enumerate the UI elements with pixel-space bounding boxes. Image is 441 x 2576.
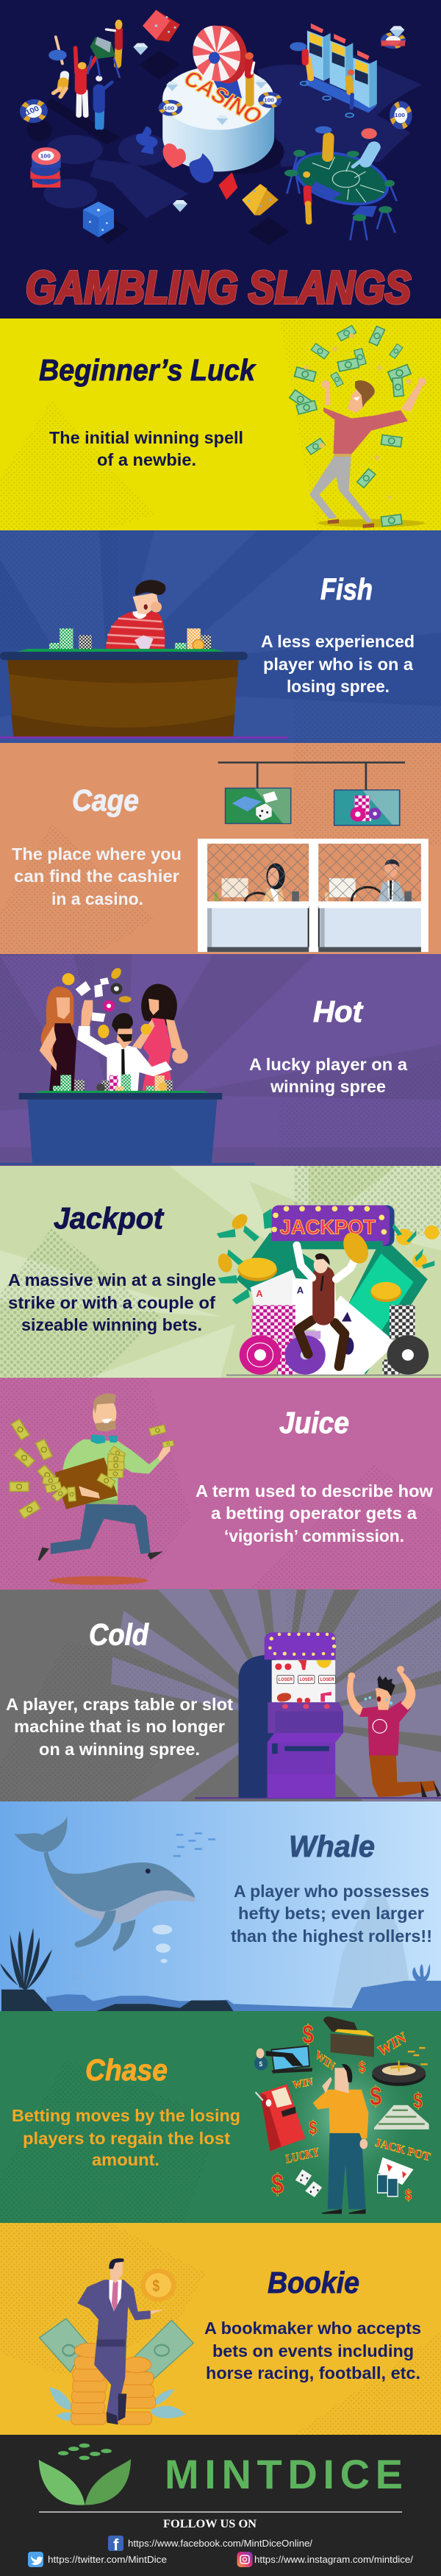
- table: [0, 1091, 254, 1165]
- definition: [6, 1695, 233, 1759]
- arm and hand: [157, 1442, 171, 1462]
- definition: [8, 1270, 216, 1334]
- definition: [12, 844, 182, 908]
- visitors: [49, 20, 122, 127]
- coral: [412, 1964, 430, 1982]
- panel: bookie: [0, 2223, 441, 2435]
- slot machine and loser: [195, 1632, 441, 1799]
- word stickers: WIN: [292, 2075, 314, 2091]
- running man with cash: [10, 1393, 174, 1585]
- panel: chase: [0, 2011, 441, 2223]
- definition: A massive win at a single: [8, 1270, 216, 1289]
- icon: facebook: f: [113, 2536, 119, 2554]
- coins and flying notes: [216, 1209, 439, 1304]
- heading: Hot: [313, 995, 364, 1028]
- dollar signs: $: [309, 2117, 317, 2138]
- definition: A less experienced: [261, 632, 415, 651]
- flying coins and cards: [62, 967, 152, 1038]
- jackpot scene: [216, 1205, 441, 1376]
- casino sign: CASINO: [179, 65, 268, 129]
- hostess: [245, 52, 254, 103]
- cashier: woman: [215, 864, 299, 901]
- suits: [136, 127, 214, 183]
- icon: twitter: [28, 2552, 43, 2567]
- definition: A player, craps table or slot: [6, 1695, 233, 1714]
- chip stack: 100: [40, 153, 51, 160]
- word stickers: JACK POT: [374, 2136, 431, 2164]
- definition: losing spree.: [287, 677, 390, 696]
- heading: Cage: [72, 783, 139, 817]
- banknotes: [10, 1419, 174, 1518]
- card table: [284, 127, 397, 241]
- banknotes: [40, 2319, 193, 2380]
- cashier counters: [198, 763, 429, 952]
- definition: [204, 2319, 421, 2383]
- floating coin: $: [152, 2277, 159, 2296]
- slot machine: [255, 2084, 305, 2151]
- businessman on coins: [40, 2258, 193, 2424]
- seaweed: [0, 1928, 52, 1990]
- whale: [14, 1816, 195, 1951]
- definition: on a winning spree.: [39, 1740, 200, 1759]
- playing cards: A: [256, 1288, 263, 1299]
- seabed scene: [0, 1816, 441, 2011]
- slot machines: [290, 24, 377, 117]
- definition: The place where you: [12, 844, 182, 864]
- dollar signs: $: [414, 2090, 423, 2113]
- definition: a betting operator gets a: [211, 1504, 417, 1523]
- icon: instagram: [237, 2552, 253, 2567]
- definition: can find the cashier: [14, 867, 179, 886]
- heading: Whale: [289, 1829, 375, 1863]
- woman right: [132, 983, 188, 1092]
- big banknotes: [236, 1232, 428, 1375]
- word stickers: WIN: [376, 2029, 409, 2061]
- logo mark: [39, 2444, 131, 2505]
- definition: The initial winning spell: [49, 428, 243, 447]
- leaves: [49, 2387, 186, 2421]
- player: [106, 580, 165, 649]
- heading: Beginner’s Luck: [39, 353, 257, 387]
- dollar signs: $: [405, 2186, 412, 2203]
- chip stacks: [53, 1075, 173, 1092]
- coin stacks: [71, 2343, 156, 2424]
- wordmark: MINTDICE: [165, 2451, 403, 2497]
- head: [93, 1393, 116, 1431]
- panel: juice: [0, 1378, 441, 1590]
- panel: cold: [0, 1589, 441, 1801]
- follow us heading: FOLLOW US ON: [163, 2518, 257, 2530]
- definition: ‘vigorish’ commission.: [224, 1526, 404, 1545]
- definition: than the highest rollers!!: [231, 1926, 432, 1946]
- definition: [249, 1055, 408, 1096]
- slot machine: LOSER: [300, 1677, 313, 1682]
- treasure chest: [323, 2017, 374, 2057]
- bubbles: [152, 1925, 172, 1963]
- definition: Betting moves by the losing: [12, 2106, 240, 2125]
- slot machine: [239, 1632, 343, 1798]
- dollar signs: $: [302, 2019, 314, 2049]
- definition: sizeable winning bets.: [21, 1315, 202, 1334]
- definition: strike or with a couple of: [8, 1293, 215, 1312]
- dice: [83, 10, 279, 238]
- rays: [111, 1589, 441, 1801]
- definition: of a newbie.: [97, 450, 196, 469]
- winning player with companions: [0, 967, 254, 1165]
- man: [77, 1000, 172, 1092]
- icon: facebook: [108, 2536, 123, 2554]
- man: [313, 2064, 368, 2214]
- panel: cage: [0, 743, 441, 954]
- dollar signs: $: [359, 2059, 365, 2077]
- heading: Cold: [89, 1618, 149, 1651]
- marquee sign: JACKPOT: [280, 1216, 376, 1239]
- heading: Chase: [85, 2053, 168, 2087]
- definition: players to regain the lost: [23, 2129, 230, 2148]
- panel: beginner's luck: [0, 319, 441, 530]
- playing cards: [378, 2157, 414, 2196]
- playing cards: [251, 1270, 397, 1375]
- definition: winning spree: [270, 1077, 386, 1096]
- cylinder stage: [162, 66, 274, 171]
- panel: jackpot: [0, 1166, 441, 1378]
- heading: Jackpot: [54, 1201, 165, 1235]
- definition: horse racing, football, etc.: [206, 2363, 420, 2383]
- cash pile: [374, 2105, 429, 2130]
- losing player at table: [0, 580, 288, 739]
- chips: 100: [395, 112, 406, 118]
- man: [77, 2258, 165, 2424]
- slot machine: LOSER: [320, 1677, 334, 1682]
- heading: Juice: [279, 1406, 349, 1440]
- laptop: [254, 2046, 312, 2074]
- definition: [261, 632, 415, 696]
- word stickers: [285, 2029, 431, 2166]
- hanging monitors: [218, 763, 405, 825]
- dice: [295, 2169, 322, 2197]
- booth frame: [198, 839, 429, 952]
- dollar signs: $: [271, 2169, 284, 2200]
- cashier: man: [325, 859, 412, 901]
- chips: [240, 1305, 429, 1375]
- panel: whale: [0, 1801, 441, 2012]
- floating coin: [140, 2269, 176, 2302]
- marquee sign: [271, 1205, 395, 1246]
- dollar signs: [271, 2019, 423, 2203]
- definition: A term used to describe how: [196, 1481, 434, 1501]
- sun rays: [0, 954, 441, 1166]
- panel: footer: [0, 2435, 441, 2576]
- casino illustration: [15, 10, 422, 245]
- chips: [15, 26, 412, 129]
- table: [0, 649, 248, 737]
- instagram link: https://www.instagram.com/mintdice/: [254, 2554, 413, 2565]
- roulette: [372, 2048, 428, 2086]
- dealer: [297, 1245, 360, 1367]
- chips: 100: [164, 105, 175, 111]
- definition: amount.: [92, 2150, 159, 2169]
- chips: 100: [264, 97, 275, 104]
- slot machine: LOSER: [279, 1677, 293, 1682]
- wire mesh: [207, 844, 421, 901]
- word stickers: WIN: [313, 2049, 337, 2074]
- chips: 100: [24, 104, 40, 117]
- definition: A lucky player on a: [249, 1055, 408, 1074]
- definition: [196, 1481, 434, 1545]
- definition: [231, 1882, 432, 1946]
- chip stacks: [49, 628, 211, 650]
- heading: Fish: [320, 572, 373, 606]
- prize wheel: [189, 23, 251, 98]
- woman left: [40, 986, 76, 1092]
- definition: A player who possesses: [234, 1882, 429, 1901]
- definition: machine that is no longer: [14, 1717, 225, 1736]
- definition: A bookmaker who accepts: [204, 2319, 421, 2338]
- definition: in a casino.: [51, 889, 143, 908]
- playing cards: A: [297, 1285, 304, 1295]
- briefcase: [55, 1457, 118, 1509]
- laptop: S: [259, 2060, 262, 2068]
- heading: Bookie: [268, 2266, 359, 2299]
- panel: hot: [0, 954, 441, 1166]
- panel: header: [0, 0, 441, 319]
- chip stack: [30, 147, 61, 188]
- panel: fish: [0, 530, 441, 743]
- sun rays: [0, 530, 441, 743]
- dollar signs: $: [370, 2080, 381, 2111]
- definition: hefty bets; even larger: [238, 1904, 424, 1923]
- banknotes: [290, 325, 411, 527]
- word stickers: LUCKY: [285, 2146, 320, 2166]
- crying man: [347, 1666, 441, 1797]
- small fish: [173, 1832, 215, 1857]
- facebook link: https://www.facebook.com/MintDiceOnline/: [128, 2538, 312, 2549]
- man with raining money: [290, 325, 426, 528]
- twitter link: https://twitter.com/MintDice: [48, 2554, 167, 2565]
- sun rays: [0, 1166, 441, 1378]
- definition: bets on events including: [212, 2341, 414, 2360]
- gems: [133, 43, 267, 212]
- definition: player who is on a: [263, 655, 414, 674]
- thinking gambler: [254, 2017, 431, 2214]
- definition: [12, 2106, 240, 2169]
- definition: [49, 428, 243, 469]
